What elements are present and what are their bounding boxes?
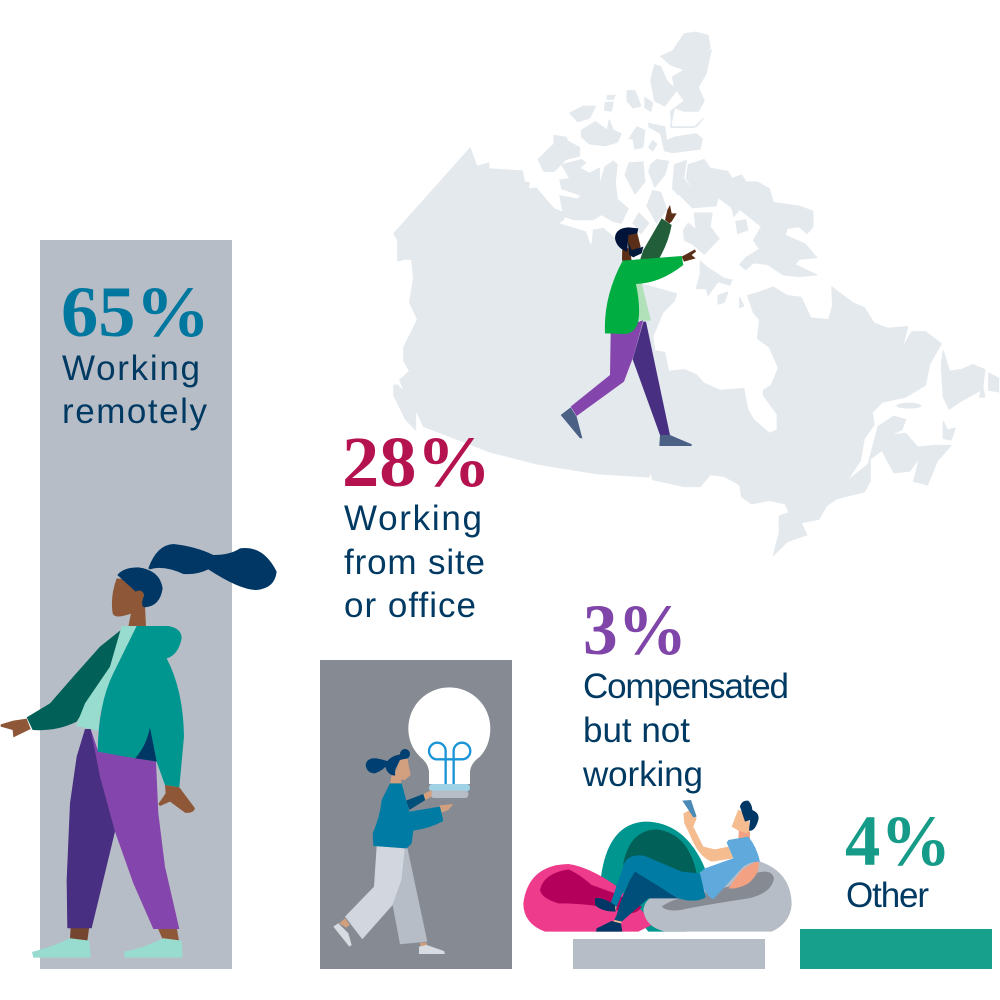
text: working remotely: remotely — [62, 392, 208, 431]
label: 65%: 65% — [61, 272, 210, 352]
label: 28%: 28% — [342, 422, 491, 502]
bar: working from site — [320, 660, 512, 969]
bar: working remotely — [40, 240, 232, 969]
illustration: man on bean bags with phone — [523, 800, 792, 932]
text: working remotely: Working — [62, 349, 200, 388]
bar: other — [800, 929, 992, 969]
illustration: woman with ponytail walking — [1, 544, 277, 958]
text: compensated but not working: working — [582, 755, 703, 794]
icon: light bulb — [408, 687, 490, 798]
illustration: woman carrying light bulb — [333, 687, 490, 954]
bar: compensated — [573, 939, 765, 969]
illustration: man pointing at map — [561, 205, 696, 446]
text: working from site or office: or office — [344, 586, 476, 625]
label: 4%: 4% — [845, 801, 951, 881]
text: compensated but not working: Compensated — [583, 667, 789, 706]
text: working from site or office: Working — [344, 499, 482, 538]
text: compensated but not working: but not — [583, 711, 690, 750]
text: working from site or office: from site — [344, 543, 485, 582]
text: other: Other — [846, 876, 929, 915]
map of Canada — [394, 32, 999, 556]
label: 3%: 3% — [583, 590, 687, 670]
